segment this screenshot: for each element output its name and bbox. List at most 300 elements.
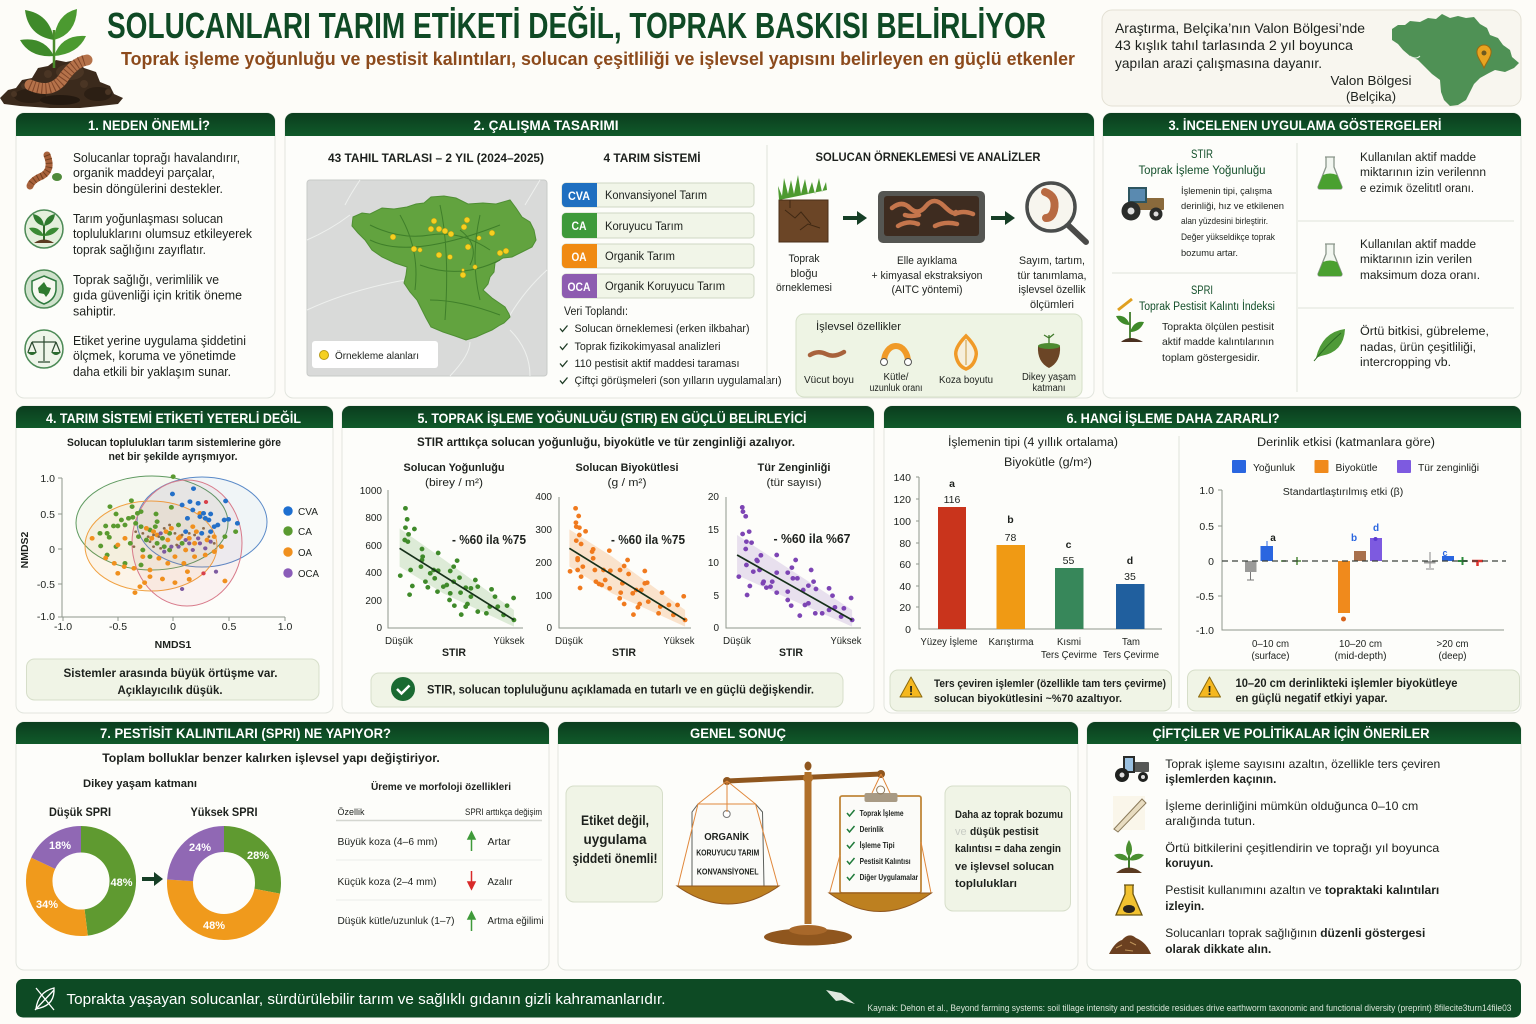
tag: organic label: ORGANİK bbox=[704, 830, 750, 843]
chart: low SPRI donut: 18% bbox=[49, 840, 71, 852]
chart: species richness: Yüksek bbox=[830, 636, 862, 647]
footer banner bbox=[16, 979, 1521, 1018]
study description text: 43 kışlık tahıl tarlasında 2 yıl boyunca bbox=[1115, 37, 1353, 53]
trait labels: Kütle/ bbox=[884, 372, 909, 383]
legend: farming systems: OCA bbox=[298, 568, 319, 580]
chart: high SPRI donut: 24% bbox=[189, 842, 211, 854]
text: reduce tillage: işlemlerden kaçının. bbox=[1165, 772, 1276, 786]
panel: 4. farming label insufficient bbox=[16, 406, 333, 713]
chart: species richness: 5 bbox=[713, 591, 719, 602]
trait labels: Koza boyutu bbox=[939, 375, 993, 386]
caption: measurement bbox=[1018, 255, 1086, 311]
list: collected data: 110 pestisit aktif maddesi taraması bbox=[574, 358, 740, 370]
callout: not the label: uygulama bbox=[584, 831, 647, 847]
clipboard: practice checklist bbox=[830, 774, 931, 893]
table: reproduction and morphology traits bbox=[336, 780, 544, 931]
chart: depth effect: Tür zenginliği bbox=[1418, 463, 1479, 474]
caption: hand sorting: + kimyasal ekstraksiyon bbox=[872, 270, 982, 282]
chart: depth effect: Biyokütle bbox=[1336, 463, 1378, 474]
text: intensification: topluluklarını olumsuz etkileyerek bbox=[73, 227, 253, 241]
text: applied dose two bbox=[1360, 239, 1480, 282]
panel: recommendations bbox=[1087, 722, 1521, 970]
chart: depth effect: -0.5 bbox=[1196, 591, 1214, 603]
chart: worm density: - %60 ila %75 bbox=[452, 532, 526, 547]
chart: depth effect: 0–10 cm bbox=[1252, 639, 1289, 650]
source citation: Kaynak: Dehon et al., Beyond farming systems: soil tillage intensity and pesticide residues drive earthworm taxonomic and functional diversity (preprint) 8filecite3turn14file03 bbox=[868, 1003, 1512, 1013]
heading: GENEL SONUÇ bbox=[690, 726, 786, 741]
chart: low SPRI donut: Düşük SPRI bbox=[49, 807, 111, 819]
caption: hand sorting: (AITC yöntemi) bbox=[892, 284, 962, 296]
trait labels bbox=[804, 372, 1076, 394]
STIR description: bozumu artar. bbox=[1181, 248, 1238, 259]
callout: less disturbance: Daha az toprak bozumu bbox=[955, 809, 1063, 821]
text: applied dose one: e ezimık özelitıtl oranı. bbox=[1360, 183, 1474, 195]
callout: less disturbance bbox=[945, 786, 1070, 911]
icon: tractor bbox=[1115, 757, 1149, 782]
chart: worm density bbox=[360, 462, 526, 659]
map legend bbox=[312, 341, 438, 368]
chart: tillage type biomass: 100 bbox=[893, 516, 911, 528]
callout: inversion tillage bbox=[890, 670, 1172, 711]
caption: hand sorting bbox=[872, 255, 982, 296]
text: worms as indicator bbox=[1165, 926, 1425, 956]
callout: overlap bbox=[26, 659, 319, 700]
chart: high SPRI donut bbox=[180, 807, 269, 932]
text: shallow depth: aralığında tutun. bbox=[1165, 814, 1255, 828]
chart: NMDS ordination: -0.5 bbox=[109, 621, 127, 633]
chart: species richness: (tür sayısı) bbox=[766, 477, 822, 489]
icon: sprout with worm on soil bbox=[0, 9, 123, 108]
chart: species richness: Düşük bbox=[723, 636, 752, 647]
panel: 3. indicators bbox=[1103, 113, 1521, 398]
chart: species richness: 10 bbox=[708, 558, 719, 569]
chart: tillage type biomass: b bbox=[1007, 514, 1014, 526]
text: worms as indicator: Solucanları toprak sağlığının düzenli göstergesi bbox=[1165, 926, 1425, 940]
chart: worm biomass: Düşük bbox=[555, 636, 584, 647]
box: functional traits bbox=[796, 314, 1082, 397]
icon: shield bbox=[25, 270, 63, 308]
callout: not the label: şiddeti önemli! bbox=[572, 850, 658, 866]
chart: worm biomass: 400 bbox=[535, 492, 552, 503]
STIR description bbox=[1181, 186, 1284, 259]
map: sampling sites bbox=[307, 180, 547, 376]
text: monitor residues: izleyin. bbox=[1165, 899, 1204, 913]
text: applied dose two: Kullanılan aktif madde bbox=[1360, 239, 1476, 251]
list: collected data bbox=[560, 306, 782, 387]
chart: species richness bbox=[708, 462, 862, 659]
chart: NMDS ordination: 1.0 bbox=[40, 473, 55, 485]
intro text: Toplam bolluklar benzer kalırken işlevsel yapı değiştiriyor. bbox=[102, 751, 440, 765]
map legend: Örnekleme alanları bbox=[335, 350, 419, 362]
icon: soil pile bbox=[1109, 935, 1151, 954]
chart: depth effect: b bbox=[1351, 533, 1357, 544]
text: shallow depth: İşleme derinliğini mümkün olduğunca 0–10 cm bbox=[1165, 799, 1418, 813]
chart: NMDS ordination: 0.5 bbox=[40, 509, 55, 521]
text: applied dose one: miktarının izin verilennn bbox=[1360, 167, 1486, 179]
box: functional traits: İşlevsel özellikler bbox=[816, 320, 901, 333]
chart: NMDS ordination: 0 bbox=[49, 544, 55, 556]
chart: worm biomass: Solucan Biyokütlesi bbox=[576, 462, 678, 474]
clipboard: practice checklist: İşleme Tipi bbox=[860, 840, 895, 850]
text: worms aerate soil: besin döngülerini destekler. bbox=[73, 182, 223, 196]
chart: depth effect: Yoğunluk bbox=[1253, 463, 1296, 474]
callout: STIR conclusion: STIR, solucan topluluğunu açıklamada en tutarlı ve en güçlü değişkendir. bbox=[427, 682, 814, 696]
caption: measurement: Sayım, tartım, bbox=[1019, 255, 1085, 267]
chart: depth effect: 1.0 bbox=[1199, 485, 1214, 497]
caption: soil block: Toprak bbox=[788, 253, 820, 265]
chart: depth effect: 0.5 bbox=[1199, 521, 1214, 533]
chart: worm biomass: (g / m²) bbox=[608, 477, 646, 489]
table: reproduction and morphology traits: Azalır bbox=[488, 876, 513, 888]
text: intensification bbox=[73, 212, 253, 257]
list: farming systems: CA bbox=[572, 219, 587, 233]
chart: NMDS ordination: -1.0 bbox=[54, 621, 72, 633]
text: worms as indicator: olarak dikkate alın. bbox=[1165, 942, 1271, 956]
chart: worm density: STIR bbox=[442, 647, 466, 659]
chart: worm density: Solucan Yoğunluğu bbox=[404, 462, 504, 474]
caption: measurement: ölçümleri bbox=[1030, 299, 1074, 311]
STIR description: Değer yükseldikçe toprak bbox=[1181, 232, 1275, 243]
text: cover crops bbox=[1165, 841, 1440, 870]
text: reduce tillage bbox=[1165, 757, 1440, 786]
text: worms aerate soil: Solucanlar toprağı havalandırır, bbox=[73, 151, 240, 165]
callout: depth effect: 10–20 cm derinlikteki işlemler biyokütleye bbox=[1236, 676, 1458, 690]
callout: inversion tillage: solucan biyokütlesini ~%70 azaltıyor. bbox=[934, 693, 1122, 705]
chart: worm biomass: - %60 ila %75 bbox=[611, 532, 685, 547]
caption: measurement: tür tanımlama, bbox=[1018, 270, 1086, 282]
panel: 1. why it matters bbox=[16, 113, 275, 398]
chart: low SPRI donut: 48% bbox=[110, 877, 133, 889]
text: applied dose one bbox=[1360, 152, 1486, 195]
heading: 3. İNCELENEN UYGULAMA GÖSTERGELERİ bbox=[1168, 118, 1442, 133]
chart: tillage type biomass bbox=[893, 436, 1162, 661]
list: collected data: Çiftçi görüşmeleri (son yılların uygulamaları) bbox=[574, 375, 782, 387]
chart: species richness: 15 bbox=[708, 525, 719, 536]
intro text: net bir şekilde ayrışmıyor. bbox=[108, 451, 238, 463]
map label: Valon Bölgesi bbox=[1330, 73, 1412, 88]
text: soil health: Toprak sağlığı, verimlilik ve bbox=[73, 273, 219, 287]
chart: tillage type biomass: Ters Çevirme bbox=[1103, 650, 1159, 661]
subheading: sampling: SOLUCAN ÖRNEKLEMESİ VE ANALİZLER bbox=[816, 151, 1041, 164]
study description text bbox=[1115, 20, 1365, 71]
subheading: vertical layer: Dikey yaşam katmanı bbox=[83, 778, 197, 790]
SPRI definition title bbox=[1139, 285, 1275, 313]
callout: inversion tillage: ! bbox=[909, 683, 913, 698]
STIR definition title bbox=[1138, 149, 1266, 177]
chart: tillage type biomass: 20 bbox=[899, 602, 911, 614]
panel: 7. pesticide residues bbox=[16, 722, 549, 970]
tag: organic label bbox=[692, 804, 764, 886]
icon: seedling bbox=[1114, 840, 1144, 873]
text: cover crops: Örtü bitkilerini çeşitlendirin ve toprağı yıl boyunca bbox=[1165, 841, 1440, 855]
chart: NMDS ordination: NMDS2 bbox=[19, 531, 31, 568]
chart: depth effect: -1.0 bbox=[1196, 625, 1214, 637]
table: reproduction and morphology traits: Üreme ve morfoloji özellikleri bbox=[371, 780, 511, 793]
text: soil health bbox=[73, 273, 242, 318]
SPRI description: aktif madde kalıntılarının bbox=[1162, 336, 1274, 348]
text: intensification: Tarım yoğunlaşması solucan bbox=[73, 212, 223, 226]
SPRI definition title: SPRI bbox=[1191, 285, 1213, 297]
chart: worm biomass: 300 bbox=[535, 525, 552, 536]
chart: species richness: Tür Zenginliği bbox=[758, 462, 830, 474]
chart: tillage type biomass: Yüzey İşleme bbox=[920, 635, 978, 648]
chart: depth effect: c bbox=[1442, 548, 1448, 558]
chart: worm density: 600 bbox=[365, 541, 382, 552]
chart: NMDS ordination: 0.5 bbox=[222, 621, 236, 633]
chart: tillage type biomass: Karıştırma bbox=[988, 637, 1034, 648]
icon: magnifier with worm bbox=[1027, 183, 1086, 242]
chart: species richness: - %60 ila %67 bbox=[774, 531, 850, 546]
study description text: yapılan arazi çalışmasına dayanır. bbox=[1115, 55, 1322, 71]
text: intensification: toprak sağlığını zayıflatır. bbox=[73, 243, 206, 257]
chart: tillage type biomass: 35 bbox=[1124, 571, 1136, 583]
callout: not the label bbox=[566, 786, 662, 902]
chart: tillage type biomass: d bbox=[1127, 555, 1133, 567]
map label: (Belçika) bbox=[1346, 89, 1396, 104]
chart: tillage type biomass: 120 bbox=[893, 494, 911, 506]
trait labels: Vücut boyu bbox=[804, 375, 854, 386]
text: worms aerate soil: organik maddeyi parçalar, bbox=[73, 166, 215, 180]
chart: depth effect bbox=[1196, 437, 1506, 662]
text: soil health: gıda güvenliği için kritik öneme bbox=[73, 288, 242, 302]
callout: depth effect: ! bbox=[1207, 683, 1212, 698]
arrow bbox=[142, 872, 163, 886]
icon: body length bbox=[810, 352, 844, 356]
STIR description: alan yüzdesini birleştirir. bbox=[1181, 216, 1268, 227]
chart: worm biomass: 200 bbox=[535, 558, 552, 569]
table: reproduction and morphology traits: Küçük koza (2–4 mm) bbox=[338, 876, 436, 888]
chart: worm density: Düşük bbox=[385, 636, 414, 647]
list: farming systems: CVA bbox=[568, 189, 590, 203]
chart: tillage type biomass: c bbox=[1066, 539, 1072, 551]
chart: worm biomass bbox=[535, 462, 695, 659]
list: collected data: Solucan örneklemesi (erken ilkbahar) bbox=[574, 323, 750, 335]
caption: soil block: bloğu bbox=[790, 268, 818, 280]
callout: STIR conclusion bbox=[371, 673, 843, 707]
chart: NMDS ordination: -0.5 bbox=[37, 579, 55, 591]
study description text: Araştırma, Belçika’nın Valon Bölgesi’nde bbox=[1115, 20, 1365, 36]
chart: worm biomass: STIR bbox=[612, 647, 636, 659]
table: reproduction and morphology traits: Düşük kütle/uzunluk (1–7) bbox=[338, 915, 454, 927]
text: practice intensity: Etiket yerine uygulama şiddetini bbox=[73, 334, 246, 348]
clipboard: practice checklist: Toprak İşleme bbox=[860, 808, 904, 818]
text: other practices: nadas, ürün çeşitliliği, bbox=[1360, 342, 1476, 354]
chart: tillage type biomass: 60 bbox=[899, 559, 911, 571]
chart: worm density: 1000 bbox=[360, 486, 382, 497]
STIR description: İşlemenin tipi, çalışma bbox=[1181, 186, 1273, 197]
text: other practices: intercropping vb. bbox=[1360, 357, 1451, 369]
intro text bbox=[67, 437, 281, 463]
clipboard: practice checklist: Derinlik bbox=[860, 824, 884, 834]
callout: inversion tillage: Ters çeviren işlemler (özellikle tam ters çevirme) bbox=[934, 678, 1166, 690]
chart: tillage type biomass: 0 bbox=[905, 624, 911, 636]
chart: tillage type biomass: 140 bbox=[893, 472, 911, 484]
chart: worm biomass: 100 bbox=[535, 591, 552, 602]
SPRI description: Toprakta ölçülen pestisit bbox=[1162, 321, 1274, 333]
heading: 7. PESTİSİT KALINTILARI (SPRI) NE YAPIYOR? bbox=[100, 726, 391, 741]
footer message: Toprakta yaşayan solucanlar, sürdürülebilir tarım ve sağlıklı gıdanın gizli kahramanlarıdır. bbox=[66, 991, 666, 1008]
chart: depth effect: Standartlaştırılmış etki (β) bbox=[1283, 487, 1403, 498]
chart: worm density: 400 bbox=[365, 568, 382, 579]
title: SOLUCANLARI TARIM ETİKETİ DEĞİL, TOPRAK BASKISI BELİRLİYOR bbox=[107, 5, 1046, 46]
callout: less disturbance: düşük pestisit bbox=[970, 826, 1039, 838]
chart: high SPRI donut: Yüksek SPRI bbox=[190, 807, 258, 819]
icon: feather bbox=[826, 990, 855, 1004]
chart: high SPRI donut: 28% bbox=[247, 850, 269, 862]
text: practice intensity: ölçmek, koruma ve yönetimde bbox=[73, 349, 236, 363]
chart: tillage type biomass: 40 bbox=[899, 581, 911, 593]
chart: depth effect: (mid-depth) bbox=[1334, 651, 1386, 662]
trait labels: uzunluk oranı bbox=[870, 383, 922, 394]
text: worms aerate soil bbox=[73, 151, 240, 196]
chart: tillage type biomass: 55 bbox=[1063, 555, 1074, 567]
trait labels: katmanı bbox=[1032, 383, 1066, 394]
text: applied dose one: Kullanılan aktif madde bbox=[1360, 152, 1476, 164]
list: farming systems: Organik Koruyucu Tarım bbox=[605, 281, 725, 293]
text: shallow depth bbox=[1165, 799, 1418, 828]
subheading: fields: 43 TAHIL TARLASI – 2 YIL (2024–2025) bbox=[328, 151, 544, 165]
chart: depth effect: 0 bbox=[1208, 556, 1214, 568]
caption: measurement: işlevsel özellik bbox=[1018, 284, 1086, 296]
STIR description: derinliği, hız ve etkilenen bbox=[1181, 201, 1284, 212]
table: reproduction and morphology traits: Artar bbox=[488, 836, 511, 848]
text: monitor residues: Pestisit kullanımını azaltın ve topraktaki kalıntıları bbox=[1165, 883, 1439, 897]
chart: depth effect: d bbox=[1373, 523, 1379, 534]
STIR definition title: Toprak İşleme Yoğunluğu bbox=[1138, 164, 1266, 177]
SPRI description bbox=[1162, 321, 1274, 364]
chart: depth effect: 10–20 cm bbox=[1339, 639, 1382, 650]
callout: less disturbance: toplulukları bbox=[955, 878, 1017, 890]
illustration: balance scale bbox=[677, 762, 932, 946]
chart: tillage type biomass: 78 bbox=[1005, 532, 1016, 544]
callout: depth effect bbox=[1188, 670, 1520, 711]
heading: 1. NEDEN ÖNEMLİ? bbox=[88, 118, 210, 133]
icon: flask one bbox=[1318, 157, 1342, 189]
chart: worm density: Yüksek bbox=[494, 636, 525, 647]
clipboard: practice checklist: Pestisit Kalıntısı bbox=[860, 856, 911, 866]
heading: 2. ÇALIŞMA TASARIMI bbox=[474, 118, 618, 133]
callout: not the label: Etiket değil, bbox=[581, 812, 649, 828]
table: reproduction and morphology traits: Büyük koza (4–6 mm) bbox=[338, 836, 438, 848]
text: soil health: sahiptir. bbox=[73, 304, 116, 318]
subtitle: Toprak işleme yoğunluğu ve pestisit kalıntıları, solucan çeşitliliği ve işlevsel yapısını belirleyen en güçlü etkenler bbox=[121, 48, 1075, 69]
callout: depth effect: en güçlü negatif etkiyi yapar. bbox=[1236, 691, 1388, 705]
chart: worm biomass: Yüksek bbox=[664, 636, 695, 647]
chart: low SPRI donut bbox=[36, 807, 133, 923]
chart: tillage type biomass: Tam bbox=[1122, 637, 1140, 648]
table: reproduction and morphology traits: Özellik bbox=[338, 807, 365, 817]
list: collected data: Veri Toplandı: bbox=[564, 306, 628, 318]
text: practice intensity: daha etkili bir yaklaşım sunar. bbox=[73, 365, 231, 379]
arrow bbox=[843, 211, 867, 225]
chart: tillage type biomass: Biyokütle (g/m²) bbox=[1004, 457, 1092, 469]
chart: worm biomass: 0 bbox=[546, 623, 552, 634]
legend: farming systems: OA bbox=[298, 547, 312, 559]
chart: depth effect: (surface) bbox=[1252, 651, 1290, 662]
STIR definition title: STIR bbox=[1191, 149, 1213, 161]
caption: hand sorting: Elle ayıklama bbox=[897, 255, 958, 267]
chart: species richness: STIR bbox=[779, 647, 803, 659]
text: practice intensity bbox=[73, 334, 246, 379]
callout: less disturbance: kalıntısı = daha zengin bbox=[955, 843, 1061, 855]
caption: soil block: örneklemesi bbox=[776, 282, 832, 294]
chart: NMDS ordination bbox=[19, 473, 292, 651]
intro text: Solucan toplulukları tarım sistemlerine göre bbox=[67, 437, 281, 449]
list: farming systems: Organik Tarım bbox=[605, 251, 675, 263]
table: reproduction and morphology traits: Artma eğilimi bbox=[488, 915, 544, 927]
chart: tillage type biomass: Ters Çevirme bbox=[1041, 650, 1097, 661]
chart: tillage type biomass: İşlemenin tipi (4 yıllık ortalama) bbox=[948, 436, 1118, 449]
legend: farming systems: CVA bbox=[298, 506, 318, 518]
text: other practices bbox=[1360, 326, 1489, 369]
trait labels: Dikey yaşam bbox=[1022, 372, 1076, 383]
tag: organic label: KONVANSİYONEL bbox=[697, 866, 759, 876]
chart: depth effect: >20 cm bbox=[1436, 639, 1468, 650]
SPRI description: toplam göstergesidir. bbox=[1162, 352, 1260, 364]
chart: high SPRI donut: 48% bbox=[203, 920, 225, 932]
panel: 2. study design bbox=[285, 113, 1094, 398]
chart: tillage type biomass: a bbox=[949, 478, 955, 490]
chart: tillage type biomass: 80 bbox=[899, 538, 911, 550]
text: applied dose two: miktarının izin verilen bbox=[1360, 254, 1472, 266]
chart: species richness: 20 bbox=[708, 492, 719, 503]
heading: 4. TARIM SİSTEMİ ETİKETİ YETERLİ DEĞİL bbox=[46, 411, 301, 426]
icon: balance bbox=[25, 330, 63, 368]
chart: NMDS ordination: NMDS1 bbox=[155, 639, 192, 651]
icon: ruler bbox=[1113, 796, 1146, 832]
clipboard: practice checklist: Diğer Uygulamalar bbox=[860, 872, 919, 882]
panel: 6. which tillage more harmful bbox=[884, 406, 1521, 713]
tag: organic label: KORUYUCU TARIM bbox=[696, 848, 759, 858]
list: farming systems: OA bbox=[572, 250, 587, 264]
chart: depth effect: (deep) bbox=[1438, 651, 1466, 662]
chart: low SPRI donut: 34% bbox=[36, 899, 58, 911]
icon: pesticide flask bbox=[1116, 885, 1142, 915]
icon: soil block bbox=[778, 175, 828, 242]
heading: ÇİFTÇİLER VE POLİTİKALAR İÇİN ÖNERİLER bbox=[1152, 726, 1430, 741]
text: cover crops: koruyun. bbox=[1165, 856, 1213, 870]
chart: worm density: 0 bbox=[376, 623, 382, 634]
text: reduce tillage: Toprak işleme sayısını azaltın, özellikle ters çeviren bbox=[1165, 757, 1440, 771]
table: reproduction and morphology traits: SPRI arttıkça değişim bbox=[465, 807, 542, 817]
heading: 5. TOPRAK İŞLEME YOĞUNLUĞU (STIR) EN GÜÇLÜ BELİRLEYİCİ bbox=[418, 411, 806, 426]
icon: plant in circle bbox=[25, 210, 63, 248]
chart: worm density: 800 bbox=[365, 513, 382, 524]
callout: overlap: Sistemler arasında büyük örtüşme var. bbox=[64, 666, 278, 680]
panel: 5. STIR strongest bbox=[342, 406, 874, 713]
icon: sorting tray with worms bbox=[878, 191, 985, 243]
icon: flask two bbox=[1318, 244, 1342, 276]
text: applied dose two: maksimum doza oranı. bbox=[1360, 270, 1480, 282]
chart: NMDS ordination: 1.0 bbox=[278, 621, 292, 633]
text: monitor residues bbox=[1165, 883, 1439, 913]
chart: species richness: 0 bbox=[713, 623, 719, 634]
callout: less disturbance: ve işlevsel solucan bbox=[955, 861, 1054, 873]
chart: worm density: 200 bbox=[365, 596, 382, 607]
list: collected data: Toprak fizikokimyasal analizleri bbox=[574, 341, 720, 353]
text: other practices: Örtü bitkisi, gübreleme, bbox=[1360, 326, 1489, 338]
map label bbox=[1330, 73, 1412, 104]
list: farming systems: Konvansiyonel Tarım bbox=[605, 190, 707, 202]
chart: NMDS ordination: 0 bbox=[170, 621, 176, 633]
chart: depth effect: Derinlik etkisi (katmanlara göre) bbox=[1257, 437, 1435, 449]
list: farming systems: Koruyucu Tarım bbox=[605, 221, 683, 233]
chart: tillage type biomass: 116 bbox=[944, 494, 961, 506]
panel: study location bbox=[1102, 10, 1521, 106]
caption: soil block bbox=[776, 253, 832, 294]
chart: depth effect: a bbox=[1270, 533, 1276, 544]
list: farming systems bbox=[562, 183, 754, 298]
